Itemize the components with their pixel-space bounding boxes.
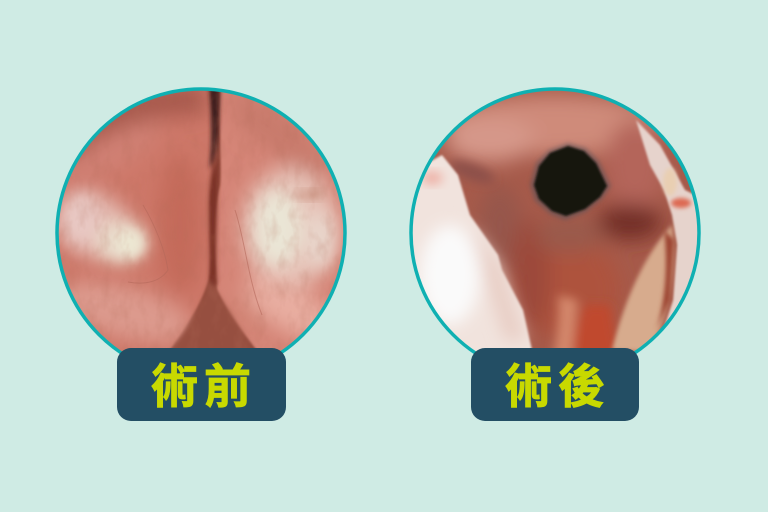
label text: 術前 — [151, 360, 257, 413]
teal ring — [411, 89, 699, 377]
photo: after surgery endoscopic view — [412, 90, 698, 352]
photo: before surgery endoscopic view — [58, 90, 344, 352]
tissue creases — [128, 205, 262, 315]
panel: before surgery — [49, 84, 350, 421]
central cleft — [172, 91, 248, 348]
infographic canvas — [55, 87, 701, 421]
label box: before surgery — [117, 348, 286, 421]
label text: 術後 — [505, 360, 611, 413]
left lobe shading — [49, 84, 205, 355]
white tissue left — [412, 154, 533, 352]
surface texture — [61, 92, 338, 332]
dark airway opening — [530, 143, 611, 220]
right lobe shading — [232, 100, 343, 342]
white tissue right — [636, 120, 698, 324]
teal ring — [57, 89, 345, 377]
label box: after surgery — [471, 348, 639, 421]
tan fold right — [612, 225, 673, 352]
panel: after surgery — [405, 85, 705, 421]
